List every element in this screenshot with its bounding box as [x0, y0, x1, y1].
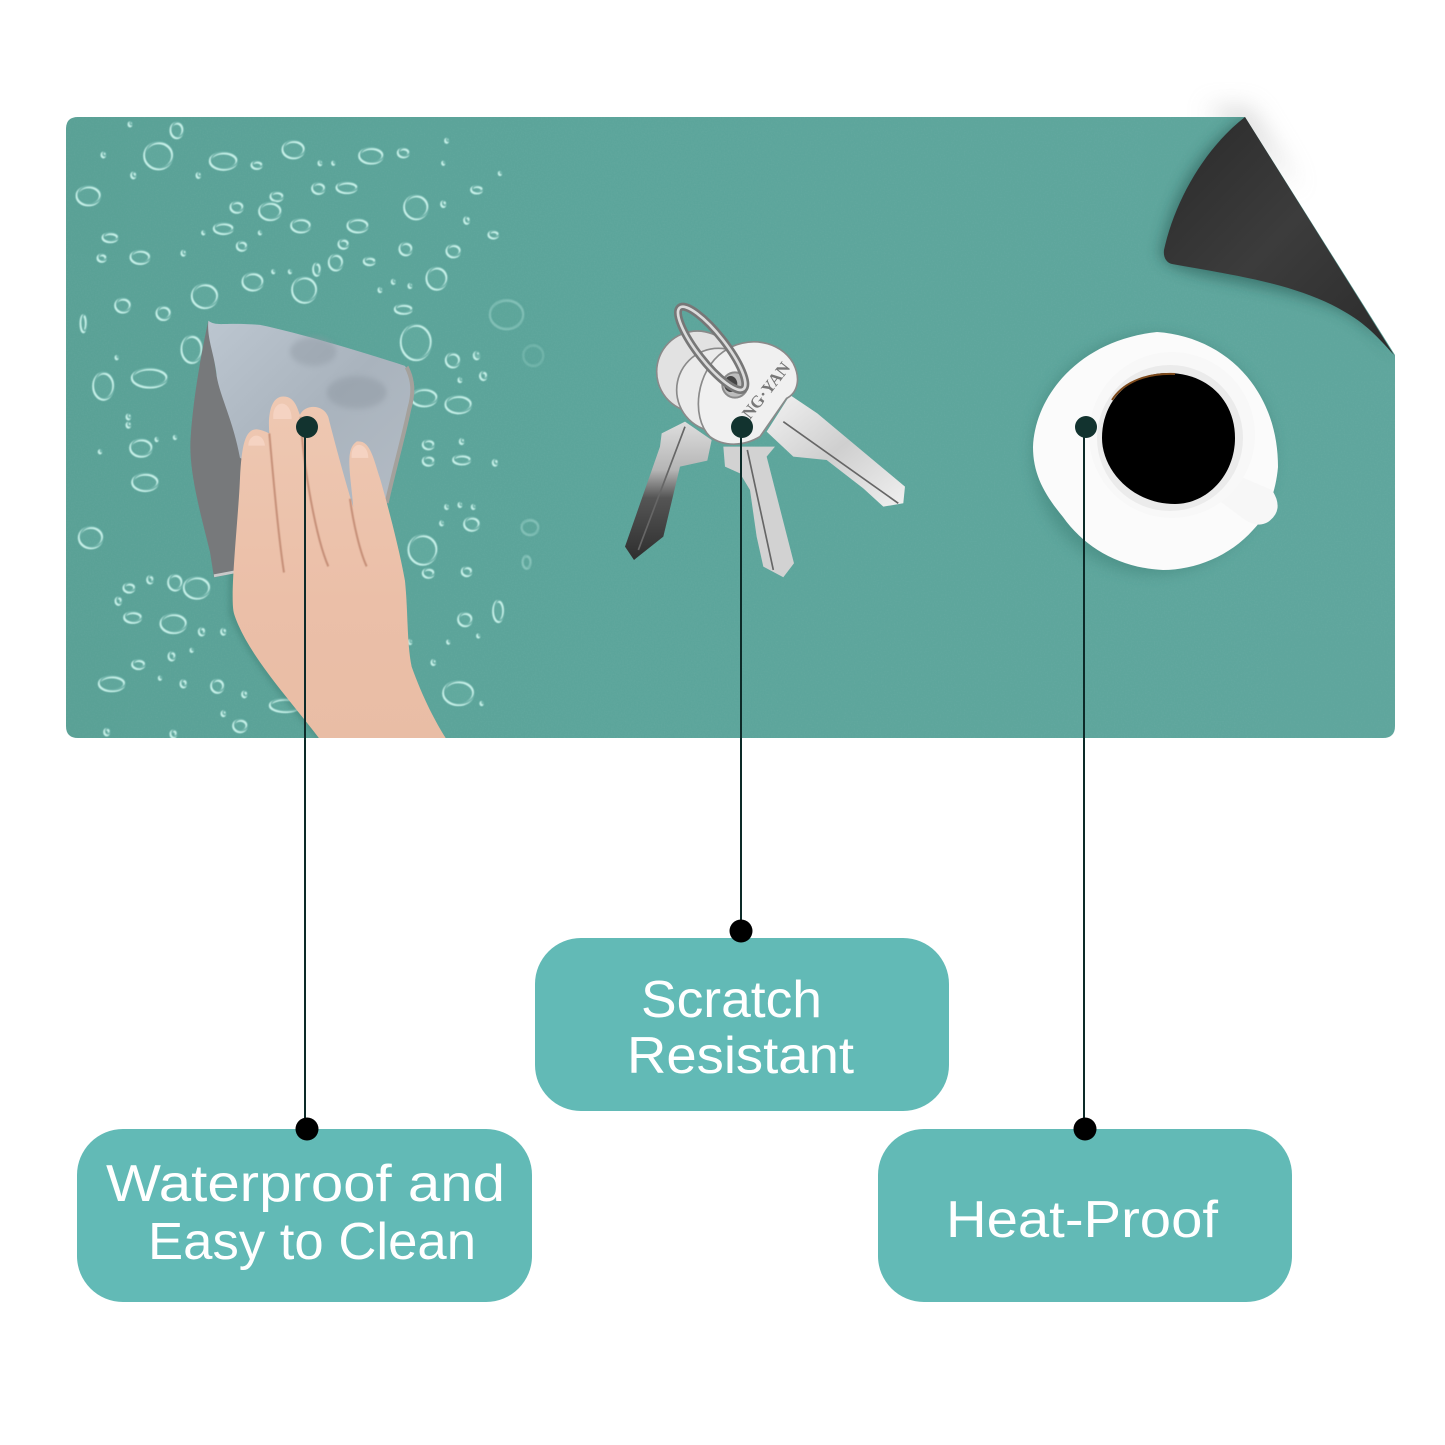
key hole	[722, 372, 748, 398]
mat texture	[66, 117, 1395, 738]
key head front	[698, 342, 798, 444]
panel: desk mat	[66, 108, 1395, 738]
key blade left	[625, 422, 712, 560]
finger gaps	[269, 417, 367, 573]
callout line: scratch	[730, 416, 753, 942]
hand shadow	[228, 574, 318, 738]
label: scratch resistant: Resistant	[627, 1027, 855, 1085]
marker dot above label	[1074, 1118, 1096, 1140]
marker dot on saucer	[1075, 416, 1097, 438]
saucer shadow	[1032, 334, 1274, 574]
label: heat-proof: Heat-Proof	[946, 1191, 1219, 1249]
key head middle	[677, 348, 760, 432]
saucer	[1033, 332, 1278, 570]
mat surface	[66, 117, 1395, 738]
key ring	[669, 299, 754, 398]
finger nails	[248, 404, 368, 458]
cloth hem	[387, 367, 412, 503]
coffee	[1102, 373, 1235, 504]
label: scratch resistant	[535, 938, 949, 1111]
label: waterproof and easy to clean	[77, 1129, 532, 1302]
cloth blotches	[290, 337, 337, 366]
icon: keys on ring	[625, 299, 905, 577]
cup handle	[1205, 470, 1278, 525]
cloth light face	[208, 321, 413, 519]
marker dot on keys	[731, 416, 753, 438]
soft shadow behind curled corner	[1205, 108, 1300, 190]
cloth bottom hem	[214, 571, 240, 576]
marker dot above label	[296, 1118, 318, 1140]
cloth dark fold	[190, 321, 242, 577]
label: waterproof and easy to clean: Easy to Clean	[148, 1213, 476, 1271]
key head back	[657, 331, 738, 412]
label: heat-proof	[878, 1129, 1292, 1302]
curl underside	[1164, 117, 1394, 355]
callout line: heat	[1074, 416, 1097, 1140]
icon: water droplets	[77, 121, 545, 737]
curl cast shadow	[1155, 117, 1382, 339]
key brand stamp: NG·YAN	[738, 358, 795, 422]
key blade bottom	[723, 447, 794, 577]
icon: curled mat corner	[1160, 117, 1395, 360]
callout line: waterproof	[296, 416, 318, 1140]
label: scratch resistant: Scratch	[641, 971, 822, 1029]
marker dot on cloth	[296, 416, 318, 438]
label: waterproof and easy to clean: Waterproof and	[106, 1155, 505, 1213]
marker dot above label	[730, 920, 752, 942]
icon: cloth and hand wiping	[190, 321, 447, 740]
key blade grooves	[638, 422, 898, 570]
icon: coffee cup on saucer	[1032, 332, 1278, 574]
key blade right	[767, 395, 905, 507]
hand	[233, 397, 447, 740]
cup body	[1089, 352, 1255, 518]
